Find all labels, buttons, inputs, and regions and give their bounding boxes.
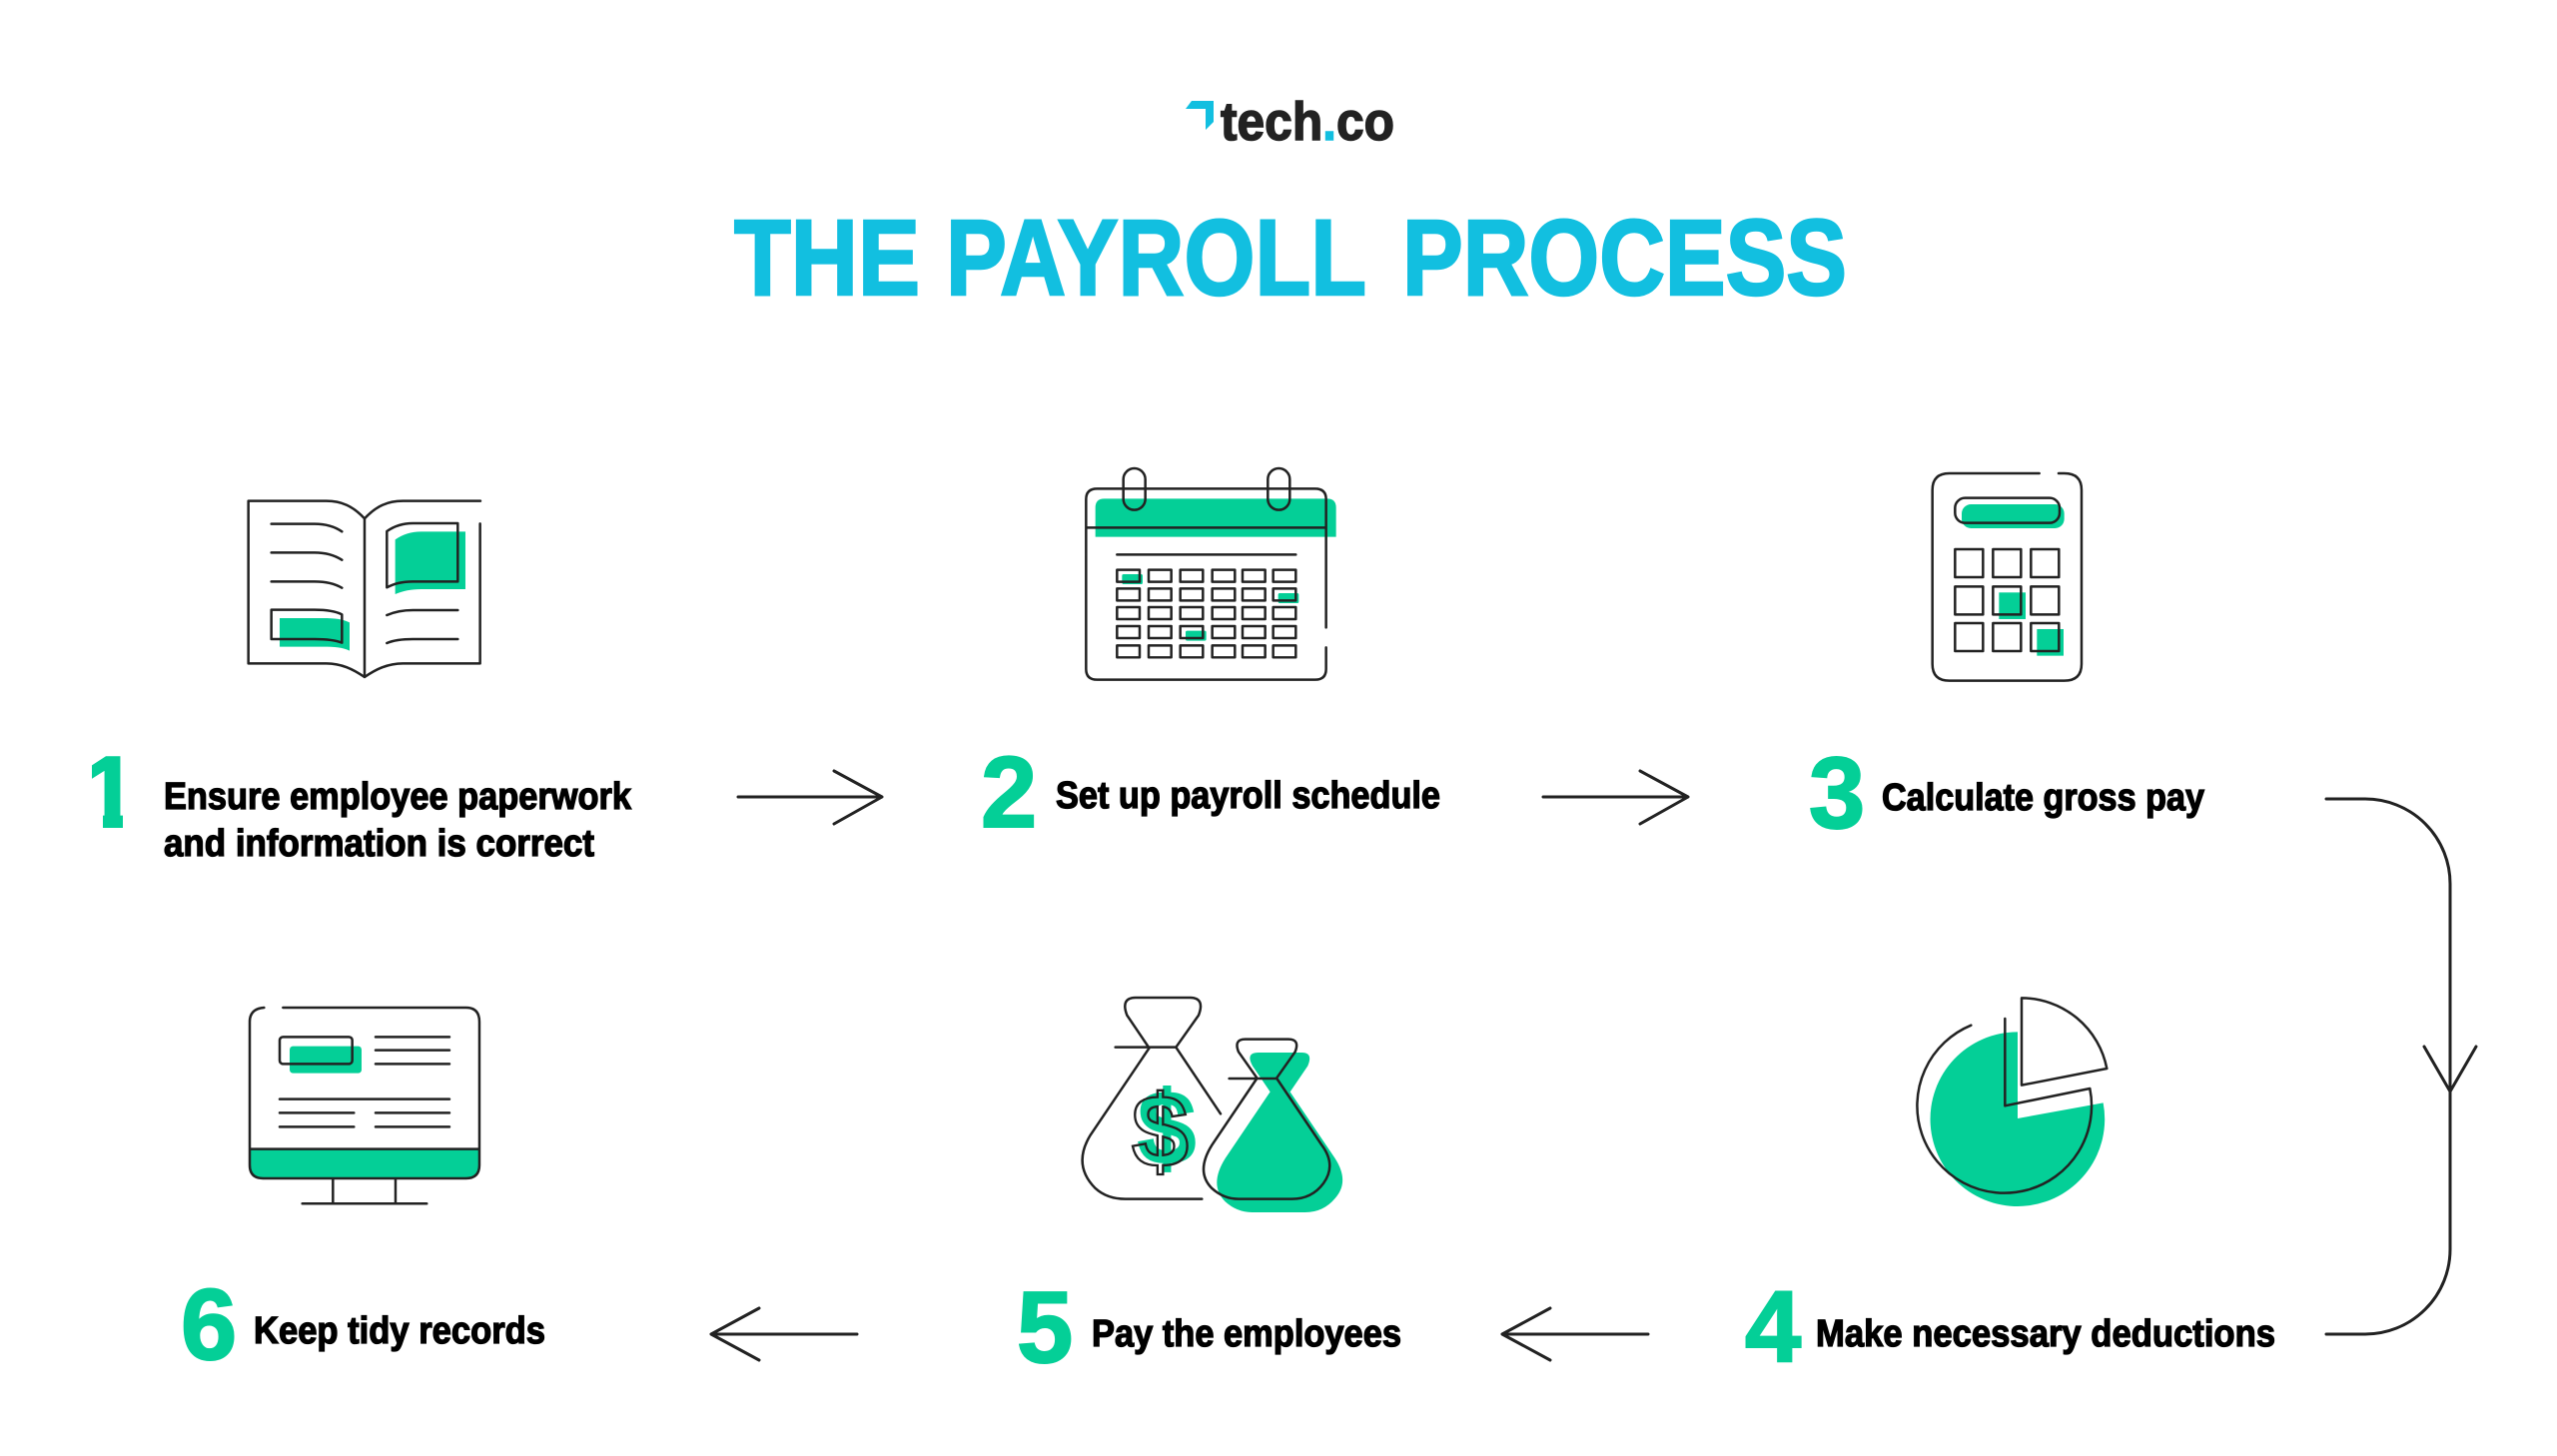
icon: calendar (1086, 468, 1336, 680)
arrow: step 3 down to 4 (2326, 799, 2476, 1334)
step 3: number: 3 (1809, 738, 1865, 850)
step 4: label: Make necessary deductions (1816, 1313, 2275, 1355)
step 1: label (164, 776, 632, 865)
arrow: step 2 to 3 (1543, 771, 1688, 824)
icon: open book (249, 501, 480, 677)
step 1: label: Ensure employee paperwork (164, 776, 632, 818)
icon: money bags: $ (1138, 1070, 1196, 1185)
step 5: number: 5 (1017, 1272, 1073, 1384)
icon: money bags: $ (1132, 1073, 1189, 1188)
title: PROCESS (1402, 197, 1847, 318)
icon: monitor (250, 1008, 479, 1203)
arrow: step 1 to 2 (738, 771, 882, 824)
icon: money bags (1083, 998, 1342, 1212)
title: PAYROLL (946, 197, 1366, 318)
step 4: number: 4 (1745, 1271, 1801, 1383)
step 1: label: and information is correct (164, 823, 594, 865)
title: THE (734, 197, 920, 318)
step 2: number: 2 (981, 737, 1037, 849)
icon: pie chart (1917, 998, 2107, 1206)
title (734, 197, 1847, 318)
step 6: number: 6 (181, 1269, 237, 1381)
step 5: label: Pay the employees (1092, 1313, 1401, 1355)
arrow: step 5 to 6 (711, 1308, 857, 1360)
logo: tech.co (1221, 92, 1394, 152)
step 6: label: Keep tidy records (254, 1310, 545, 1352)
step 3: label: Calculate gross pay (1882, 777, 2204, 819)
step 2: label: Set up payroll schedule (1056, 775, 1440, 817)
arrow: step 4 to 5 (1502, 1308, 1648, 1360)
step 1: number: 1 (82, 737, 138, 849)
icon: calculator (1933, 473, 2082, 681)
